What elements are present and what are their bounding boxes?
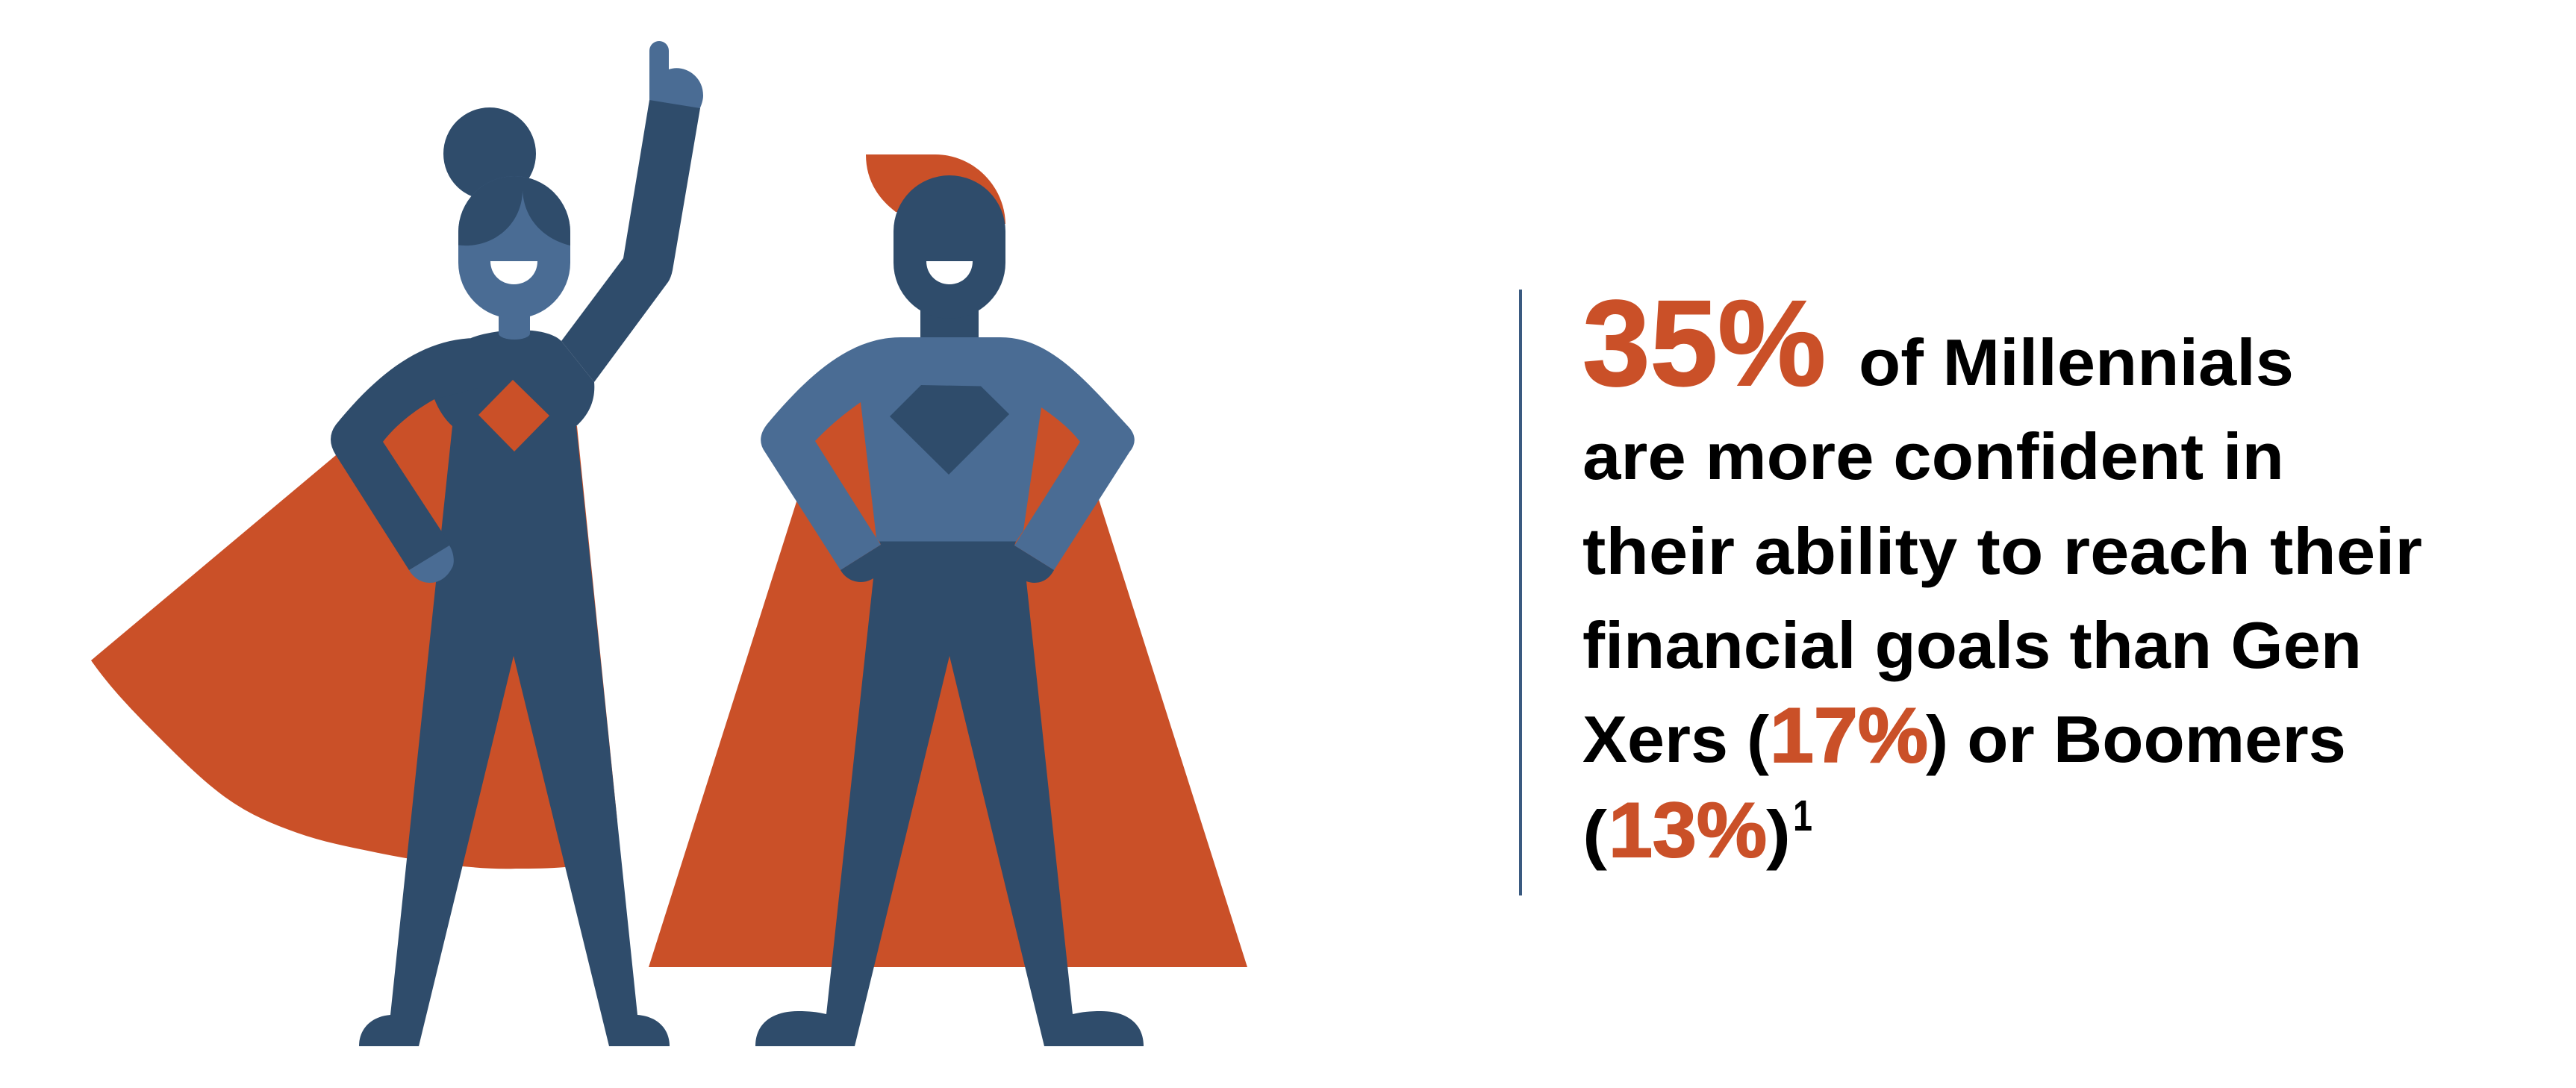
line 5 end: ) or Boomers bbox=[1926, 702, 2346, 776]
man torso and arms bbox=[761, 337, 1135, 570]
woman hand on hip bbox=[409, 545, 454, 583]
stat: 35%: 35% bbox=[1582, 275, 1826, 411]
woman neck bbox=[499, 298, 530, 340]
woman head bbox=[458, 176, 570, 319]
man cape bbox=[649, 399, 1247, 967]
man head bbox=[894, 175, 1005, 319]
line 2: are more confident in bbox=[1582, 419, 2284, 493]
vertical divider bbox=[1519, 290, 1522, 895]
man smile bbox=[926, 261, 973, 284]
line 6 open paren: ( bbox=[1582, 797, 1608, 871]
woman raised arm bbox=[561, 100, 700, 382]
stat: 17%: 17% bbox=[1770, 692, 1928, 779]
man lower body and hands bbox=[755, 542, 1144, 1046]
stat: 13%: 13% bbox=[1609, 787, 1767, 874]
illustration: man superhero bbox=[649, 154, 1247, 1046]
man hair crest bbox=[866, 154, 1005, 224]
woman raised hand bbox=[649, 41, 703, 110]
woman left arm bbox=[331, 338, 478, 570]
line 1: of Millennials bbox=[1859, 325, 2294, 399]
woman cape bbox=[91, 396, 617, 869]
footnote marker: 1 bbox=[1793, 792, 1812, 840]
man neck bbox=[920, 298, 979, 340]
line 4: financial goals than Gen bbox=[1582, 608, 2362, 682]
line 6 close paren: ) bbox=[1766, 797, 1791, 871]
line 3: their ability to reach their bbox=[1582, 514, 2422, 588]
woman hair bbox=[458, 176, 570, 246]
man chest emblem bbox=[890, 385, 1009, 475]
illustration: woman superhero bbox=[91, 41, 703, 1046]
woman hair bun bbox=[443, 107, 536, 200]
woman body and legs bbox=[359, 330, 670, 1046]
statistic text block bbox=[1582, 275, 2422, 874]
woman chest diamond bbox=[478, 380, 549, 451]
woman smile bbox=[490, 261, 537, 284]
line 5 start: Xers ( bbox=[1582, 702, 1770, 776]
